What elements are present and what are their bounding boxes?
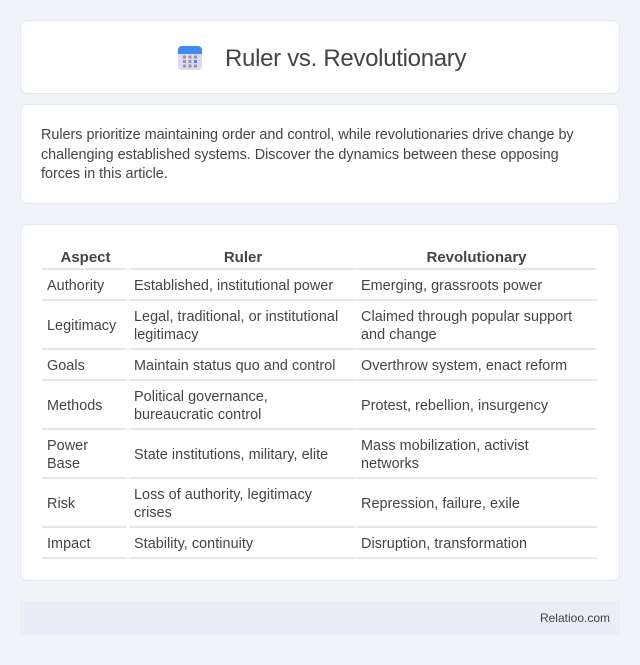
row: impact: Disruption, transformation [361,536,527,552]
row: risk: Loss of authority, legitimacy [134,487,312,503]
row: goals: Maintain status quo and control [134,358,336,374]
row: impact: Impact [47,536,90,552]
text: introduction [41,127,574,182]
row: authority: Emerging, grassroots power [361,278,542,294]
row: power base: Power [47,438,88,454]
row: risk: Repression, failure, exile [361,496,520,512]
row: authority: Authority [47,278,104,294]
text: introduction: challenging established systems. Discover the dynamics between these opposing [41,146,559,162]
title: Ruler vs. Revolutionary [225,45,466,72]
table header [60,249,527,266]
row: legitimacy: legitimacy [134,327,198,343]
row: authority: Established, institutional power [134,278,333,294]
table header: Aspect [60,249,111,266]
row: legitimacy: Legitimacy [47,318,116,334]
row: power base: networks [361,456,419,472]
panel: title card [20,20,620,94]
row: impact: Stability, continuity [134,536,253,552]
row: power base: State institutions, military, elite [134,447,328,463]
panel: introduction [20,104,620,204]
footer bar [20,601,620,635]
row: power base: Mass mobilization, activist [361,438,529,454]
row: power base [47,438,529,472]
row: methods: Methods [47,398,103,414]
row: legitimacy: and change [361,327,437,343]
row: risk [47,487,520,521]
row: goals [47,358,567,374]
row: legitimacy [47,309,572,343]
panel: comparison table [20,224,620,581]
footer text: Relatioo.com [540,611,610,625]
row: impact [47,536,527,552]
row: goals: Overthrow system, enact reform [361,358,567,374]
row: risk: crises [134,505,172,521]
row: authority [47,278,542,294]
text: introduction: forces in this article. [41,166,168,182]
row: risk: Risk [47,496,75,512]
row: legitimacy: Claimed through popular support [361,309,572,325]
row: power base: Base [47,456,80,472]
row: methods: Protest, rebellion, insurgency [361,398,548,414]
row: legitimacy: Legal, traditional, or institutional [134,309,338,325]
row: goals: Goals [47,358,85,374]
icon: calendar [178,46,202,70]
row: methods [47,389,548,423]
table header: Ruler [224,249,262,266]
text: introduction: Rulers prioritize maintaining order and control, while revolutionaries drive change by [41,127,574,143]
table header: Revolutionary [426,249,527,266]
row: methods: bureaucratic control [134,407,261,423]
row: methods: Political governance, [134,389,268,405]
